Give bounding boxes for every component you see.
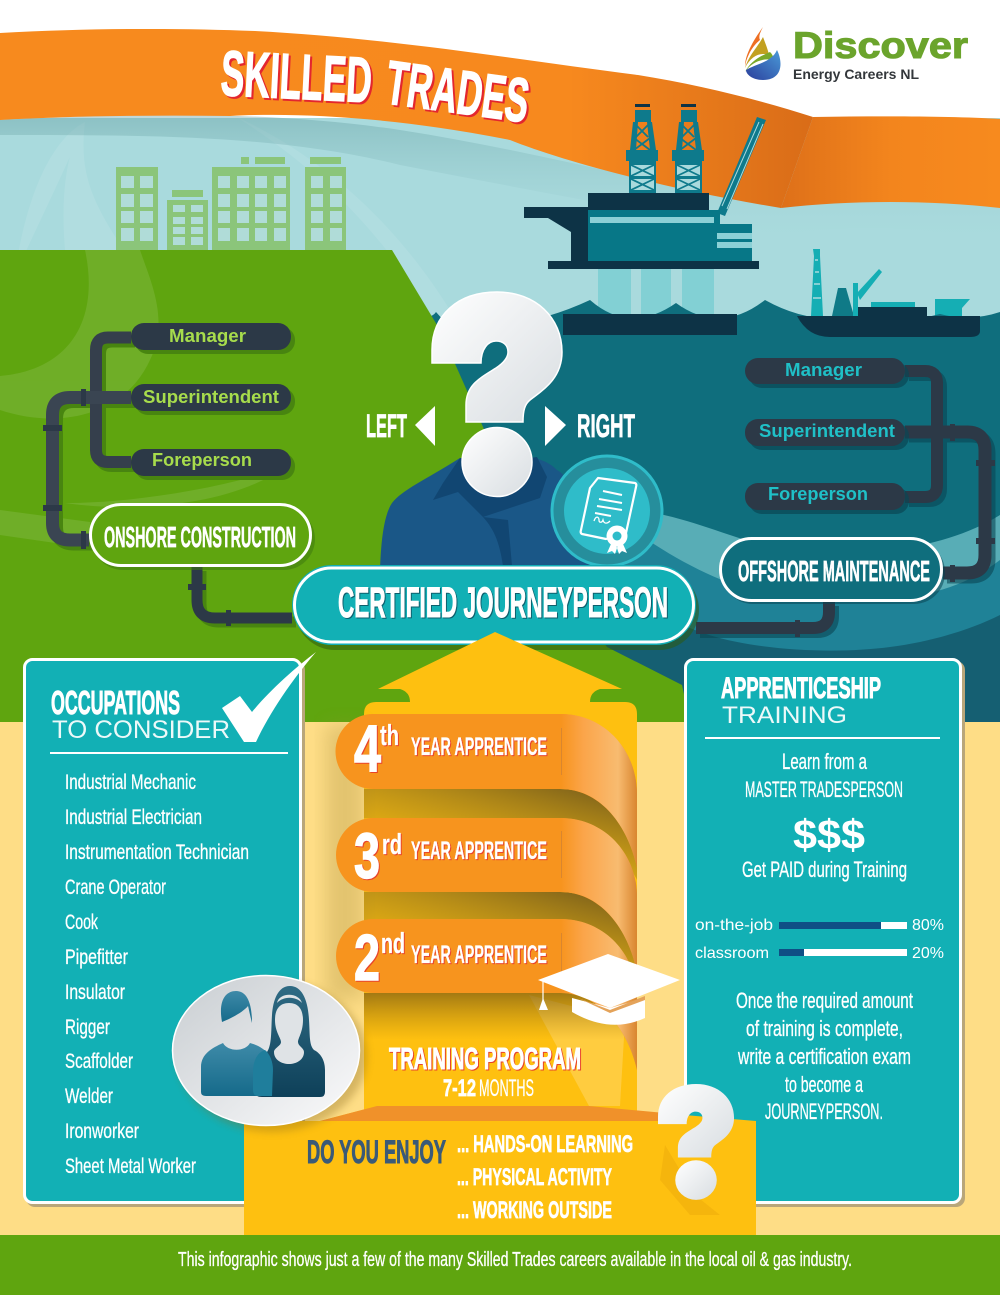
occupations list: Industrial Mechanic [65, 771, 196, 794]
yellow upward arrow [364, 632, 637, 1120]
graduation cap [538, 954, 680, 1025]
occupations list: Ironworker [65, 1120, 139, 1143]
logo: Energy Careers NL [793, 66, 919, 82]
person silhouette [380, 457, 590, 570]
occupations list [65, 771, 249, 1178]
2nd year ribbon: 2 [354, 921, 380, 994]
sea [420, 300, 1000, 725]
certification text: Once the required amount [736, 988, 913, 1013]
left role pills: Foreperson [152, 450, 252, 470]
pipes left [43, 338, 296, 626]
on-the-job bar: on-the-job [695, 917, 773, 934]
do you enjoy text: ... HANDS-ON LEARNING [457, 1131, 633, 1158]
occupations heading: OCCUPATIONS [51, 684, 180, 721]
onshore construction pill: ONSHORE CONSTRUCTION [104, 522, 296, 554]
training program text: TRAINING PROGRAM [389, 1041, 581, 1076]
left role pills: Manager [169, 326, 246, 346]
on-the-job bar [695, 917, 944, 934]
certification text: JOURNEYPERSON. [765, 1099, 883, 1124]
onshore construction pill [90, 504, 315, 570]
arrow left with label: LEFT [366, 408, 407, 444]
logo [745, 25, 968, 82]
right role pills [745, 358, 909, 514]
training program text [389, 1041, 581, 1102]
3rd year ribbon: 3 [354, 820, 380, 892]
oil platform [524, 104, 766, 320]
occupations list: Welder [65, 1085, 113, 1108]
occupations list: Pipefitter [65, 946, 128, 969]
supply ship hull [797, 307, 980, 337]
logo: Discover [793, 25, 968, 66]
3rd year ribbon [336, 818, 637, 985]
offshore maintenance pill [720, 538, 945, 604]
occupations list: Crane Operator [65, 876, 166, 899]
occupations list: Rigger [65, 1016, 110, 1039]
occupations heading [51, 684, 230, 744]
training program text: 7-12 [443, 1075, 476, 1102]
certification text: write a certification exam [737, 1044, 911, 1069]
4th year ribbon: th [380, 720, 399, 752]
sea bands [500, 480, 1000, 725]
classroom bar: classroom [695, 945, 769, 962]
ribbon side shadow [326, 725, 364, 1000]
apprenticeship panel [686, 660, 965, 1207]
green land [0, 250, 690, 722]
master tradesperson text [745, 749, 903, 802]
title: SKILLED [219, 37, 374, 116]
do you enjoy pedestal [244, 1106, 756, 1235]
occupations panel [24, 660, 305, 1207]
footer bar [0, 1235, 1000, 1295]
sandy ground [0, 722, 1000, 1235]
certified journeyperson pill [292, 565, 699, 650]
woman icon [253, 986, 325, 1097]
certificate badge [552, 456, 662, 566]
question mark [432, 292, 562, 496]
occupations list: Cook [65, 911, 98, 934]
on-the-job bar: 80% [912, 917, 944, 934]
get paid text: Get PAID during Training [742, 857, 907, 882]
orange banner [0, 29, 1000, 208]
4th year ribbon [336, 711, 637, 880]
left role pills [131, 323, 295, 480]
banner shadow [0, 115, 1000, 245]
arrow right with label: RIGHT [577, 408, 635, 444]
man icon [201, 991, 272, 1096]
3rd year ribbon: rd [382, 829, 402, 861]
2nd year ribbon: nd [381, 928, 405, 960]
supply ship upper works [811, 249, 970, 320]
occupations list: Sheet Metal Worker [65, 1155, 196, 1178]
people icon disc [172, 976, 367, 1132]
4th year ribbon: YEAR APPRENTICE [411, 733, 547, 761]
pipes right [696, 371, 995, 637]
certification text: of training is complete, [746, 1016, 903, 1041]
title: TRADES [382, 49, 533, 136]
right role pills: Manager [785, 360, 862, 380]
3rd year ribbon: YEAR APPRENTICE [411, 837, 547, 865]
classroom bar: 20% [912, 945, 944, 962]
classroom bar [695, 945, 944, 962]
occupations list: Scaffolder [65, 1050, 133, 1073]
right role pills: Superintendent [759, 421, 895, 441]
apprenticeship heading [721, 672, 881, 729]
land swooshes [0, 250, 283, 548]
4th year ribbon: 4 [354, 711, 381, 785]
do you enjoy text: DO YOU ENJOY [307, 1134, 446, 1170]
2nd year ribbon: YEAR APPRENTICE [411, 941, 547, 969]
do you enjoy text: ... PHYSICAL ACTIVITY [457, 1164, 612, 1191]
checkmark [222, 652, 316, 742]
apprenticeship heading: APPRENTICESHIP [721, 672, 881, 705]
platform pontoon [563, 314, 737, 335]
arrow right with label [545, 406, 635, 446]
apprenticeship heading: TRAINING [722, 702, 847, 729]
small question mark [658, 1084, 734, 1200]
buildings skyline [116, 157, 346, 251]
left role pills: Superintendent [143, 387, 279, 407]
2nd year ribbon [336, 919, 637, 1070]
training program text: MONTHS [479, 1075, 534, 1102]
master tradesperson text: Learn from a [782, 749, 868, 774]
occupations list: Instrumentation Technician [65, 841, 249, 864]
dollar signs: $$$ [793, 811, 865, 858]
do you enjoy text [307, 1131, 633, 1224]
certification text [736, 988, 913, 1124]
occupations list: Insulator [65, 981, 125, 1004]
certified journeyperson pill: CERTIFIED JOURNEYPERSON [338, 579, 668, 627]
certification text: to become a [785, 1072, 863, 1097]
do you enjoy text: ... WORKING OUTSIDE [457, 1197, 612, 1224]
right role pills: Foreperson [768, 484, 868, 504]
sky background [0, 118, 1000, 330]
occupations heading: TO CONSIDER [52, 716, 230, 744]
sky swooshes [15, 116, 450, 320]
occupations list: Industrial Electrician [65, 806, 202, 829]
